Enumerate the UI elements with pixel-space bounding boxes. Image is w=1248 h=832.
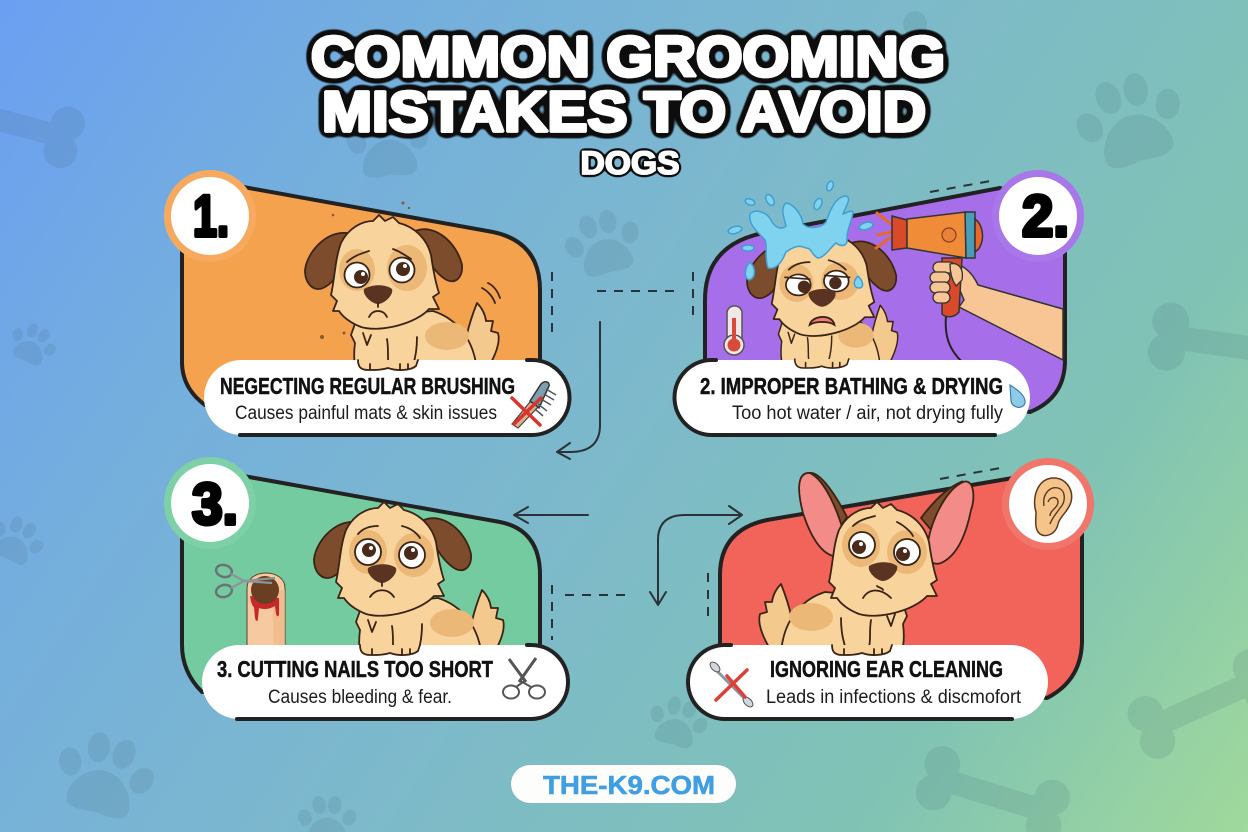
icon: thermometer <box>724 306 744 355</box>
panel 2: improper bathing and drying <box>675 170 1084 435</box>
connector arrows and dashes <box>514 180 1006 640</box>
icon: brush crossed out <box>512 382 556 428</box>
title: MISTAKES TO AVOID <box>322 80 926 144</box>
pill 2 <box>675 360 1030 435</box>
badge 3 <box>164 457 256 549</box>
icon: cotton swab crossed out <box>708 660 755 709</box>
badge 2: 2. <box>1022 184 1069 249</box>
panel 1 background <box>182 181 540 405</box>
icon: finger with bleeding nail and scissors <box>215 563 285 650</box>
text 3: Causes bleeding & fear. <box>268 687 452 708</box>
heading 1: NEGECTING REGULAR BRUSHING <box>220 373 515 399</box>
panel 3: cutting nails too short <box>164 457 568 719</box>
paws 2 <box>795 359 849 368</box>
panel 1: neglecting regular brushing <box>164 170 570 435</box>
title <box>311 25 945 144</box>
panel 4 background <box>720 472 1082 698</box>
title: COMMON GROOMING <box>311 25 945 89</box>
heading 4: IGNORING EAR CLEANING <box>770 656 1003 682</box>
badge 1 <box>164 170 256 262</box>
heading 3: 3. CUTTING NAILS TOO SHORT <box>217 656 493 682</box>
dog 2 <box>747 228 898 369</box>
pill 4 <box>688 645 1048 719</box>
paws 3 <box>360 645 420 655</box>
badge 1: 1. <box>193 184 229 249</box>
subtitle: DOGS <box>580 145 680 181</box>
text 2: Too hot water / air, not drying fully <box>732 403 1003 424</box>
panel 3 background <box>182 470 540 692</box>
panel 4: ignoring ear cleaning <box>688 458 1094 719</box>
icon: hair dryer in hand <box>892 212 1063 362</box>
water splash on head <box>727 180 874 288</box>
dog 4 <box>759 473 973 654</box>
dog 1 <box>305 215 500 373</box>
footer pill: website <box>511 765 736 803</box>
icon: water drop <box>1010 385 1025 407</box>
hot air lines <box>876 213 892 248</box>
badge 2 <box>992 170 1084 262</box>
pill 3 <box>202 645 568 719</box>
paws 4 <box>832 645 892 655</box>
dog 3 <box>314 502 504 660</box>
paws 1 <box>358 360 418 370</box>
loose fur specks <box>320 202 410 339</box>
text 4: Leads in infections & discmofort <box>766 687 1022 708</box>
text 1: Causes painful mats & skin issues <box>235 403 497 424</box>
badge 4 with ear icon <box>1002 458 1094 550</box>
badge 3: 3. <box>192 472 238 537</box>
heading 2: 2. IMPROPER BATHING & DRYING <box>700 373 1003 399</box>
panel 2 background <box>705 188 1065 412</box>
pill 1 <box>204 360 570 435</box>
icon: scissors <box>503 658 545 698</box>
footer pill: website: THE-K9.COM <box>543 770 715 800</box>
